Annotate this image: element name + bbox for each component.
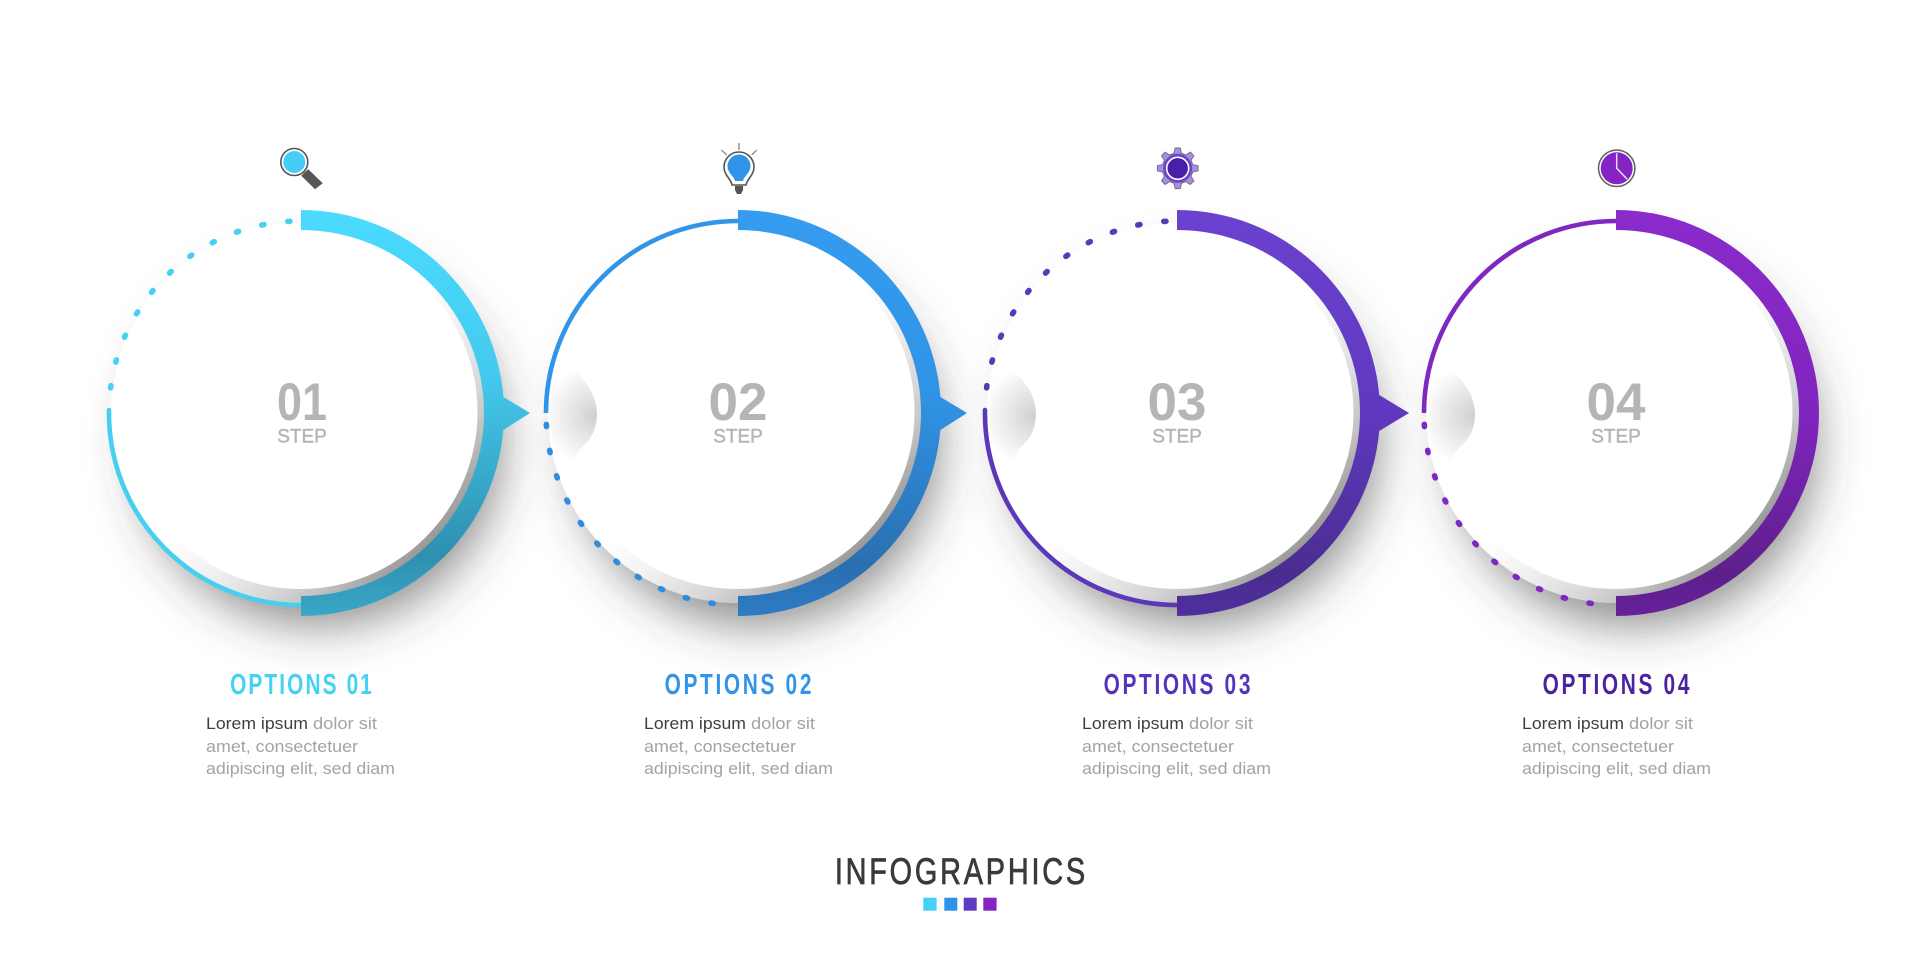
step label: STEP xyxy=(713,426,763,448)
dotted arc bottom left xyxy=(546,424,737,605)
grey inner crescent xyxy=(548,223,928,603)
panel: step 1 xyxy=(109,148,530,778)
description: Lorem ipsum xyxy=(644,714,746,733)
description: adipiscing elit, sed diam xyxy=(1082,759,1271,778)
white disk xyxy=(560,235,914,589)
white disk xyxy=(1438,235,1792,589)
description xyxy=(206,714,395,778)
option heading: OPTIONS 04 xyxy=(1543,669,1689,701)
description xyxy=(644,714,833,778)
soft drop shadows xyxy=(137,261,1816,625)
thick band with arrow xyxy=(1177,210,1409,616)
description: dolor sit xyxy=(1189,714,1253,733)
option heading: OPTIONS 03 xyxy=(1104,669,1250,701)
dotted arc bottom left xyxy=(1424,424,1615,605)
description: amet, consectetuer xyxy=(1522,737,1674,756)
option heading: OPTIONS 01 xyxy=(230,669,372,701)
grey inner crescent xyxy=(1426,223,1806,603)
solid arc bottom left xyxy=(985,410,1177,605)
number: 02 xyxy=(709,373,767,432)
description: amet, consectetuer xyxy=(206,737,358,756)
notch in disk xyxy=(989,365,1036,473)
solid arc top left xyxy=(1424,221,1616,413)
description: dolor sit xyxy=(313,714,377,733)
thick band xyxy=(1616,210,1819,616)
description: Lorem ipsum xyxy=(1522,714,1624,733)
icon: clock xyxy=(1598,150,1635,186)
icon: light bulb xyxy=(722,143,757,194)
description: dolor sit xyxy=(1629,714,1693,733)
number: 03 xyxy=(1148,373,1206,432)
description xyxy=(1082,714,1271,778)
title: INFOGRAPHICS xyxy=(835,852,1085,893)
step label: STEP xyxy=(1152,426,1202,448)
thick band with arrow xyxy=(301,210,530,616)
panel: step 3 xyxy=(985,148,1409,778)
number: 01 xyxy=(277,373,327,432)
thick band with arrow xyxy=(738,210,967,616)
panel: step 2 xyxy=(546,143,967,778)
white backing xyxy=(987,223,1367,603)
dotted arc top left xyxy=(986,221,1166,390)
step label: STEP xyxy=(277,426,327,448)
white disk xyxy=(124,235,478,589)
icon: magnifier xyxy=(281,148,323,189)
description: amet, consectetuer xyxy=(644,737,796,756)
notch in disk xyxy=(1428,365,1475,473)
description: amet, consectetuer xyxy=(1082,737,1234,756)
description: adipiscing elit, sed diam xyxy=(206,759,395,778)
grey inner crescent xyxy=(987,223,1367,603)
panel: step 4 xyxy=(1424,150,1819,778)
description: dolor sit xyxy=(751,714,815,733)
option heading: OPTIONS 02 xyxy=(665,669,811,701)
white disk xyxy=(1000,235,1354,589)
description: adipiscing elit, sed diam xyxy=(644,759,833,778)
grey inner crescent xyxy=(111,223,491,603)
dotted arc top left xyxy=(110,221,290,390)
icon: gear xyxy=(1157,148,1198,189)
step label: STEP xyxy=(1591,426,1641,448)
description: adipiscing elit, sed diam xyxy=(1522,759,1711,778)
description xyxy=(1522,714,1711,778)
notch in disk xyxy=(550,365,597,473)
colour legend squares xyxy=(923,898,997,911)
solid arc bottom left xyxy=(109,410,301,605)
number: 04 xyxy=(1587,373,1646,432)
white backing xyxy=(548,223,928,603)
white backing xyxy=(111,223,491,603)
description: Lorem ipsum xyxy=(206,714,308,733)
white backing xyxy=(1426,223,1806,603)
description: Lorem ipsum xyxy=(1082,714,1184,733)
solid arc top left xyxy=(546,221,738,413)
